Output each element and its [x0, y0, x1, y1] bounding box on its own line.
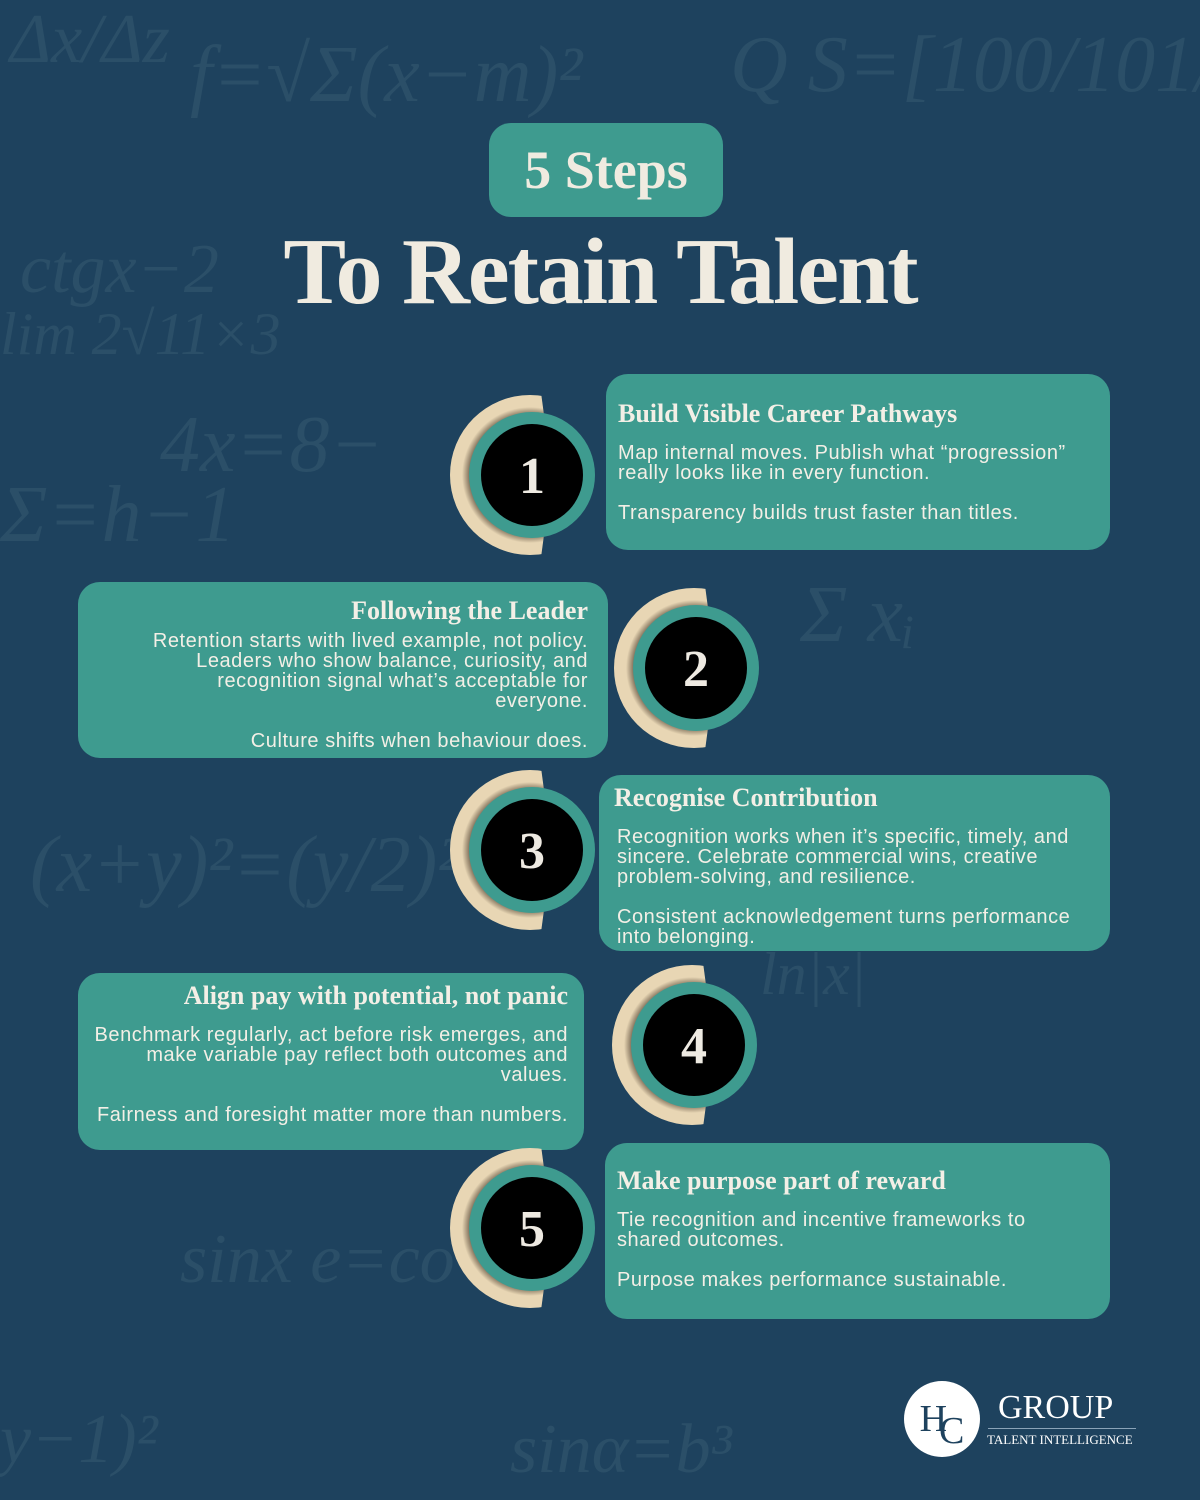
text: Σ xᵢ [800, 571, 916, 659]
badge 5 [450, 1148, 595, 1308]
step 3 box: Recognition works when it’s specific, timely, and sincere. Celebrate commercial wins, creative problem-solving, and resilience. [617, 826, 1069, 888]
text: Δx/Δz [10, 1, 170, 78]
step 3 box [599, 775, 1110, 951]
step 1 box [606, 374, 1110, 550]
badge 3: 3 [519, 823, 545, 880]
title pill: 5 Steps [524, 140, 688, 200]
step 5 box: Purpose makes performance sustainable. [617, 1269, 1007, 1291]
step 4 box: Benchmark regularly, act before risk emerges, and make variable pay reflect both outcomes and values. [95, 1024, 568, 1086]
step 2 box: Culture shifts when behaviour does. [251, 730, 588, 752]
badge 1: 1 [519, 448, 545, 505]
badge 4: 4 [681, 1018, 707, 1075]
step 5 box: Make purpose part of reward [617, 1166, 946, 1195]
text: lim 2√11×3 [0, 301, 281, 367]
step 1 box: Transparency builds trust faster than titles. [618, 502, 1019, 524]
text: ctgx−2 [20, 231, 219, 308]
badge 5: 5 [519, 1201, 545, 1258]
step 3 box: Recognise Contribution [614, 783, 878, 812]
logo: TALENT INTELLIGENCE [987, 1432, 1133, 1447]
step 1 box: Map internal moves. Publish what “progression” really looks like in every function. [618, 442, 1066, 484]
badge 1 [450, 395, 595, 555]
step 2 box [78, 582, 608, 758]
text: f=√Σ(x−m)² [190, 31, 582, 119]
text: y−1)² [0, 1401, 158, 1478]
step 5 box: Tie recognition and incentive frameworks to shared outcomes. [617, 1209, 1026, 1251]
step 2 box: Retention starts with lived example, not policy. Leaders who show balance, curiosity, and recognition signal what’s acceptable for everyone. [153, 630, 588, 712]
step 5 box [605, 1143, 1110, 1319]
text: (x+y)²=(y/2)²=x² [30, 821, 575, 909]
logo [904, 1381, 1136, 1457]
step 4 box [78, 973, 584, 1150]
logo: GROUP [998, 1389, 1113, 1426]
text: 4x=8− [160, 401, 383, 489]
step 1 box: Build Visible Career Pathways [618, 399, 957, 428]
step 2 box: Following the Leader [351, 596, 588, 625]
step 4 box: Align pay with potential, not panic [184, 981, 568, 1010]
badge 2 [614, 588, 759, 748]
main title: To Retain Talent [283, 220, 917, 324]
step 4 box: Fairness and foresight matter more than numbers. [97, 1104, 568, 1126]
badge 3 [450, 770, 595, 930]
title pill [489, 123, 723, 217]
text: Σ=h−1 [0, 471, 236, 559]
badge 4 [612, 965, 757, 1125]
text: sinα=b³ [510, 1411, 732, 1488]
text: sinx e=co [180, 1221, 455, 1298]
badge 2: 2 [683, 641, 709, 698]
text: ln|x| [760, 941, 866, 1007]
logo: HC [920, 1398, 964, 1452]
step 3 box: Consistent acknowledgement turns performance into belonging. [617, 906, 1070, 948]
